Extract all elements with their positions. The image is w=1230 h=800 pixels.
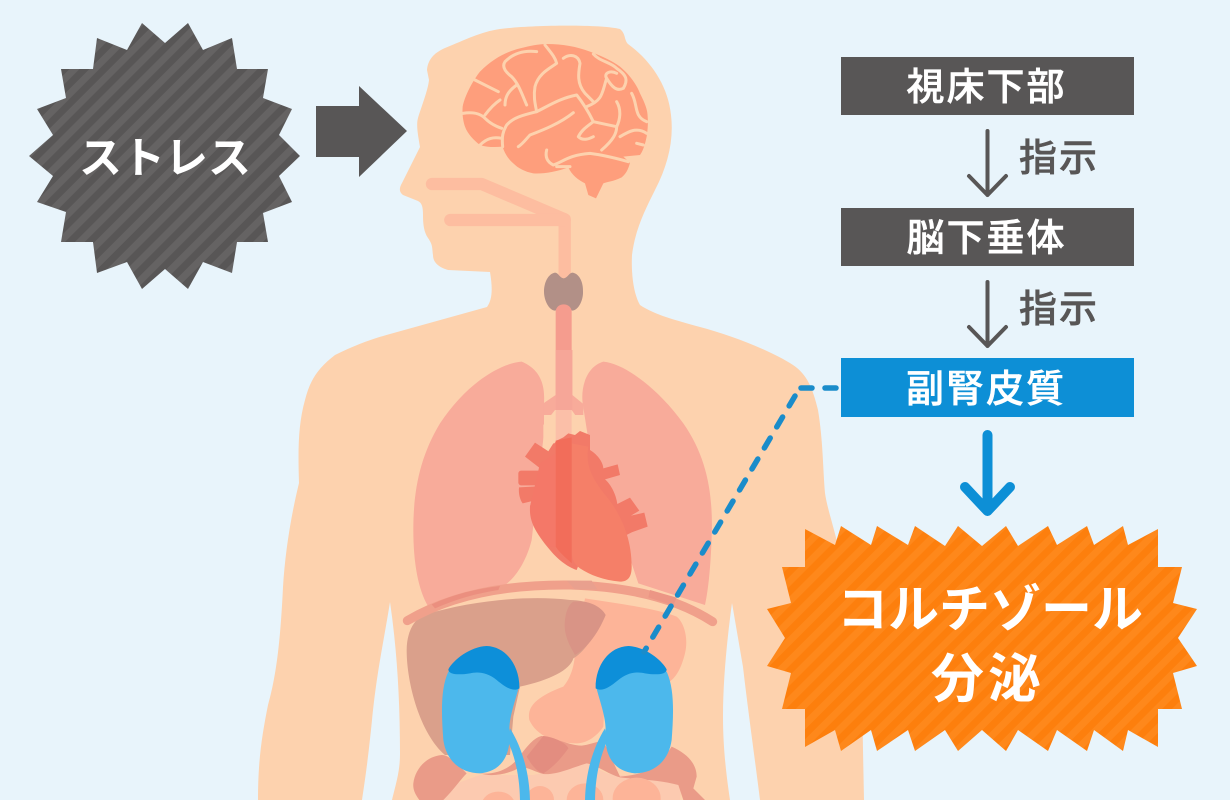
arrow: instruction 2 bbox=[969, 282, 1006, 346]
stress starburst: ストレス bbox=[79, 135, 251, 183]
left lung bbox=[413, 362, 544, 607]
lower esophagus bbox=[556, 410, 572, 450]
box: hypothalamus bbox=[841, 57, 1134, 115]
arrow: adrenal cortex to cortisol bbox=[965, 435, 1010, 511]
human body illustration bbox=[258, 26, 864, 800]
arrow: stress to brain bbox=[316, 86, 407, 177]
torso organs bbox=[407, 350, 713, 755]
label: instruction 1: 指示 bbox=[1019, 138, 1099, 180]
box: pituitary: 脳下垂体 bbox=[906, 218, 1067, 260]
diaphragm bbox=[407, 581, 713, 622]
upper esophagus bbox=[556, 304, 572, 350]
label: instruction 2: 指示 bbox=[1019, 289, 1099, 331]
arrow: instruction 1 bbox=[969, 131, 1006, 195]
brain bbox=[462, 44, 648, 198]
bronchi and trachea bbox=[543, 350, 583, 415]
box: hypothalamus: 視床下部 bbox=[906, 67, 1067, 109]
liver bbox=[407, 598, 605, 755]
heart bbox=[518, 431, 648, 582]
cortisol secretion starburst: コルチゾール bbox=[837, 581, 1143, 638]
intestines bbox=[413, 736, 705, 800]
body silhouette bbox=[258, 26, 864, 800]
right kidney bbox=[585, 646, 673, 800]
head organs bbox=[432, 44, 648, 350]
dashed leader line: adrenal cortex to adrenal gland bbox=[644, 388, 836, 652]
box: adrenal cortex bbox=[841, 358, 1134, 417]
box: adrenal cortex: 副腎皮質 bbox=[906, 369, 1066, 411]
stress starburst bbox=[29, 23, 300, 289]
box: pituitary bbox=[841, 208, 1134, 266]
gallbladder bbox=[565, 601, 606, 655]
cortisol secretion starburst: 分泌 bbox=[931, 650, 1045, 709]
kidneys bbox=[442, 646, 673, 800]
thyroid bbox=[544, 273, 583, 311]
mediastinum gap bbox=[543, 410, 587, 450]
stomach bbox=[529, 598, 686, 743]
right lung bbox=[582, 362, 712, 605]
airway and mouth tubes bbox=[432, 184, 565, 273]
cortisol secretion starburst bbox=[767, 526, 1197, 751]
left kidney bbox=[442, 646, 530, 800]
